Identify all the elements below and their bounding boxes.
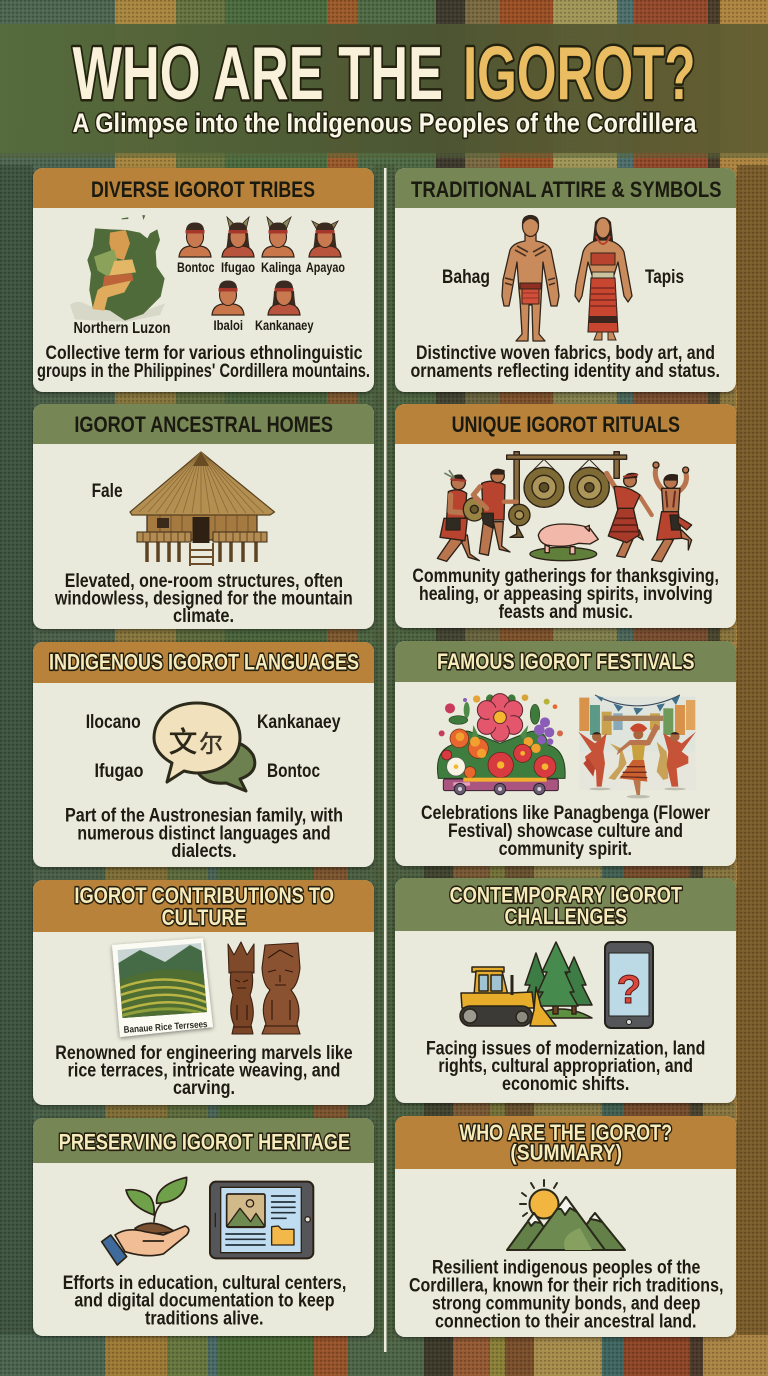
label: tapis: Tapis <box>645 266 684 288</box>
description <box>412 565 719 623</box>
tribe: kalinga: Kalinga <box>261 259 301 275</box>
description: Renowned for engineering marvels like <box>55 1042 353 1064</box>
labels: languages: Ilocano <box>86 711 141 733</box>
description <box>37 342 370 382</box>
title: WHO ARE THE <box>72 31 443 115</box>
photo: banaue rice terraces <box>110 938 213 1037</box>
photo: banaue rice terraces: Banaue Rice Terrsees <box>123 1019 208 1036</box>
description: groups in the Philippines' Cordillera mountains. <box>37 360 370 382</box>
description: connection to their ancestral land. <box>435 1310 696 1332</box>
labels: languages <box>86 711 341 782</box>
labels: languages: Kankanaey <box>257 711 341 733</box>
heading <box>450 883 682 929</box>
icon: tablet with archive <box>210 1182 313 1258</box>
description <box>54 570 353 627</box>
description: community spirit. <box>499 838 632 860</box>
heading: WHO ARE THE IGOROT? <box>459 1120 672 1145</box>
panel: unique igorot rituals <box>395 404 736 628</box>
description <box>63 1272 346 1329</box>
illustration: street dancers <box>578 695 696 798</box>
tribe: kalinga <box>261 217 301 275</box>
map of northern luzon <box>70 215 165 322</box>
labels: languages: Ifugao <box>94 760 144 782</box>
tribe: kankanaey: Kankanaey <box>255 317 314 333</box>
description: carving. <box>173 1077 235 1099</box>
description: economic shifts. <box>502 1073 629 1095</box>
heading <box>74 883 334 930</box>
label: bahag: Bahag <box>442 266 490 288</box>
tribe: ibaloi: Ibaloi <box>214 317 243 333</box>
figure: man in bahag <box>502 215 559 341</box>
central divider <box>384 168 386 1352</box>
title banner <box>0 24 768 158</box>
panel: igorot contributions to culture <box>33 880 374 1105</box>
panel: famous igorot festivals <box>395 641 736 866</box>
description: feasts and music. <box>499 601 633 623</box>
description: windowless, designed for the mountain <box>54 588 353 610</box>
tribe: ifugao <box>221 217 255 275</box>
icon: hand holding seedling <box>102 1177 189 1265</box>
tribe: apayao <box>306 221 345 275</box>
tribe: apayao: Apayao <box>306 259 345 275</box>
panel: summary <box>395 1116 736 1337</box>
panel: igorot ancestral homes <box>33 404 374 629</box>
icon: sun over mountains <box>507 1180 625 1250</box>
description <box>55 1042 353 1099</box>
icon: bulldozer and trees <box>460 942 592 1026</box>
description: rights, cultural appropriation, and <box>438 1055 693 1077</box>
illustration: flower float <box>437 694 565 795</box>
heading: INDIGENOUS IGOROT LANGUAGES <box>49 650 359 674</box>
description: rice terraces, intricate weaving, and <box>68 1060 340 1082</box>
heading: CULTURE <box>162 905 246 930</box>
description: Celebrations like Panagbenga (Flower <box>421 802 710 824</box>
description: Resilient indigenous peoples of the <box>432 1256 701 1278</box>
tribe: kankanaey <box>255 280 314 333</box>
description <box>410 342 720 382</box>
heading: IGOROT CONTRIBUTIONS TO <box>74 883 334 908</box>
description: climate. <box>173 605 234 627</box>
label: fale: Fale <box>92 480 123 502</box>
panel: contemporary igorot challenges <box>395 878 736 1103</box>
heading: IGOROT ANCESTRAL HOMES <box>74 412 333 437</box>
description <box>409 1256 723 1332</box>
heading: (SUMMARY) <box>510 1140 622 1165</box>
tribe: bontoc <box>177 222 215 275</box>
heading: FAMOUS IGOROT FESTIVALS <box>437 649 694 674</box>
icon: smartphone with question mark: ? <box>617 968 641 1012</box>
panel: indigenous igorot languages <box>33 642 374 867</box>
description: strong community bonds, and deep <box>432 1292 700 1314</box>
label: northern luzon: Northern Luzon <box>74 320 170 337</box>
icon: speech bubbles: 尔 <box>199 724 223 759</box>
icon: stilted hut <box>130 452 274 566</box>
heading: UNIQUE IGOROT RITUALS <box>452 412 680 437</box>
description <box>426 1037 705 1095</box>
description: numerous distinct languages and <box>77 822 331 844</box>
tribe: ifugao: Ifugao <box>221 259 255 275</box>
description: Efforts in education, cultural centers, <box>63 1272 346 1294</box>
description <box>421 802 710 860</box>
tribe: ibaloi <box>212 280 244 333</box>
panel: traditional attire and symbols <box>395 168 736 392</box>
labels: languages: Bontoc <box>267 760 320 782</box>
figure: woman in tapis <box>575 217 632 340</box>
panel: diverse igorot tribes <box>33 168 374 392</box>
description: Collective term for various ethnolinguistic <box>46 342 363 364</box>
icon: speech bubbles: 文 <box>168 719 198 761</box>
illustration: gong ritual with dancers and pig <box>437 452 692 562</box>
description: and digital documentation to keep <box>74 1290 335 1312</box>
description: dialects. <box>171 840 237 862</box>
description: traditions alive. <box>145 1307 264 1329</box>
subtitle: A Glimpse into the Indigenous Peoples of the Cordillera <box>72 108 697 138</box>
heading: DIVERSE IGOROT TRIBES <box>91 177 315 202</box>
heading: CONTEMPORARY IGOROT <box>450 883 682 908</box>
heading: CHALLENGES <box>504 904 627 929</box>
description: Elevated, one-room structures, often <box>65 570 343 592</box>
description: Facing issues of modernization, land <box>426 1037 705 1059</box>
panel: preserving igorot heritage <box>33 1118 374 1336</box>
description <box>65 805 343 862</box>
icon: speech bubbles <box>154 703 255 791</box>
heading <box>459 1120 672 1165</box>
icon: smartphone with question mark <box>605 942 653 1028</box>
description: Festival) showcase culture and <box>448 820 683 842</box>
description: Part of the Austronesian family, with <box>65 805 343 827</box>
heading: PRESERVING IGOROT HERITAGE <box>59 1129 350 1154</box>
tribe: bontoc: Bontoc <box>177 259 215 275</box>
icon: carved wooden figures <box>228 942 300 1034</box>
